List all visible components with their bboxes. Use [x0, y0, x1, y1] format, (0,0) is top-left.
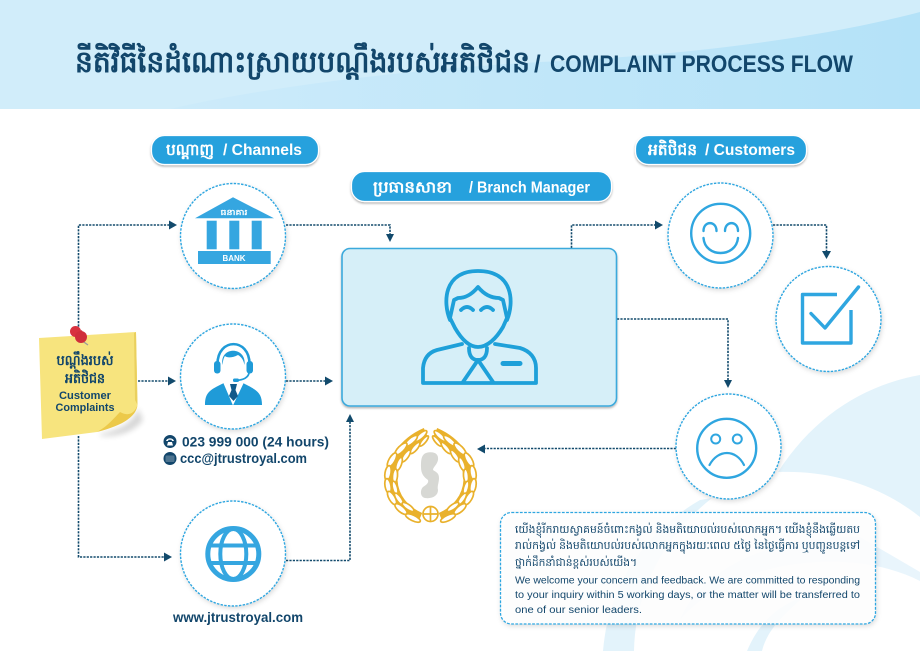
seal: National Bank emblem: [384, 429, 477, 524]
customer: satisfied: [668, 183, 773, 288]
channel: bank: BANK: [222, 253, 246, 263]
Khmer statement: [515, 522, 860, 569]
English statement: to your inquiry within 5 working days, or the matter will be transferred to: [515, 590, 860, 601]
Khmer statement: យើងខ្ញុំរីករាយស្វាគមន៍ចំពោះកង្វល់ និងមតិយោបល់របស់លោកអ្នក។ យើងខ្ញុំនឹងឆ្លើយតប: [515, 522, 860, 538]
arrow: complaints to website: [78, 436, 172, 562]
panel: branch manager: [342, 248, 616, 406]
channels heading pill: បណ្តាញ: [166, 142, 214, 160]
icon: manager: [423, 271, 536, 383]
sticky note: customer complaints: Customer: [59, 390, 112, 402]
arrow: branch manager to satisfied customer: [572, 220, 663, 248]
sticky note: customer complaints: [39, 332, 143, 439]
title: [75, 42, 853, 80]
English statement: We welcome your concern and feedback. We are committed to responding: [515, 576, 860, 586]
branch manager heading pill: ប្រធានសាខា: [373, 180, 452, 198]
sticky note: customer complaints: អតិថិជន: [65, 369, 105, 386]
Khmer statement: រាល់កង្វល់ និងមតិយោបល់របស់លោកអ្នកក្នុងរយៈពេល ៥ថ្ងៃ នៃថ្ងៃធ្វើការ ឬបញ្ជូនបន្តទៅ: [515, 538, 860, 554]
arrow: unsatisfied customer to NBC seal: [477, 444, 676, 454]
wreath: left branch: [384, 429, 430, 524]
channels heading pill: [152, 136, 318, 164]
branch manager heading pill: [352, 172, 612, 202]
channels heading pill: / Channels: [223, 142, 302, 159]
background swooshes: [603, 375, 920, 651]
channel: call centre: [180, 324, 286, 429]
arrow: complaints to bank: [78, 220, 177, 330]
contact details: 023 999 000 (24 hours): [182, 434, 329, 450]
lotus at base: [423, 506, 438, 522]
customer: unsatisfied: [676, 394, 781, 499]
title: /: [534, 51, 541, 78]
branch manager heading pill: / Branch Manager: [469, 180, 590, 196]
wreath: right branch: [431, 429, 477, 524]
English statement: [515, 576, 860, 616]
contact details: ccc@jtrustroyal.com: [180, 450, 307, 466]
title: នីតិវិធីនៃដំណោះស្រាយបណ្តឹងរបស់អតិថិជន: [75, 42, 530, 80]
arrow: complaints to call centre: [138, 376, 176, 386]
central glyph: [421, 452, 439, 498]
callout: commitment statement: [500, 512, 876, 624]
customers heading pill: អតិថិជន: [648, 139, 697, 159]
resolved: check mark: [776, 266, 881, 372]
arrow: branch manager to unsatisfied customer: [617, 319, 732, 388]
customers heading pill: [636, 136, 806, 164]
sticky note: customer complaints: បណ្តឹងរបស់: [56, 351, 114, 369]
header band: [0, 0, 920, 109]
channel: bank: ធនាគារ: [220, 208, 248, 217]
arrow: call centre to branch manager: [286, 376, 333, 386]
channel: bank: [180, 184, 286, 288]
sticky note: customer complaints: Complaints: [56, 402, 114, 414]
customers heading pill: / Customers: [705, 142, 795, 159]
English statement: one of our senior leaders.: [515, 605, 642, 616]
Khmer statement: ថ្នាក់ដឹកនាំជាន់ខ្ពស់របស់យើង។: [515, 555, 637, 569]
icon: push pin: [70, 326, 88, 345]
title: COMPLAINT PROCESS FLOW: [550, 51, 853, 78]
contact details: [164, 434, 329, 466]
arrow: satisfied customer to resolved: [773, 225, 831, 259]
website address: www.jtrustroyal.com: [172, 609, 303, 625]
arrow: bank to branch manager: [286, 225, 394, 242]
arrow: website to branch manager: [286, 414, 354, 560]
channel: website: [180, 501, 286, 606]
